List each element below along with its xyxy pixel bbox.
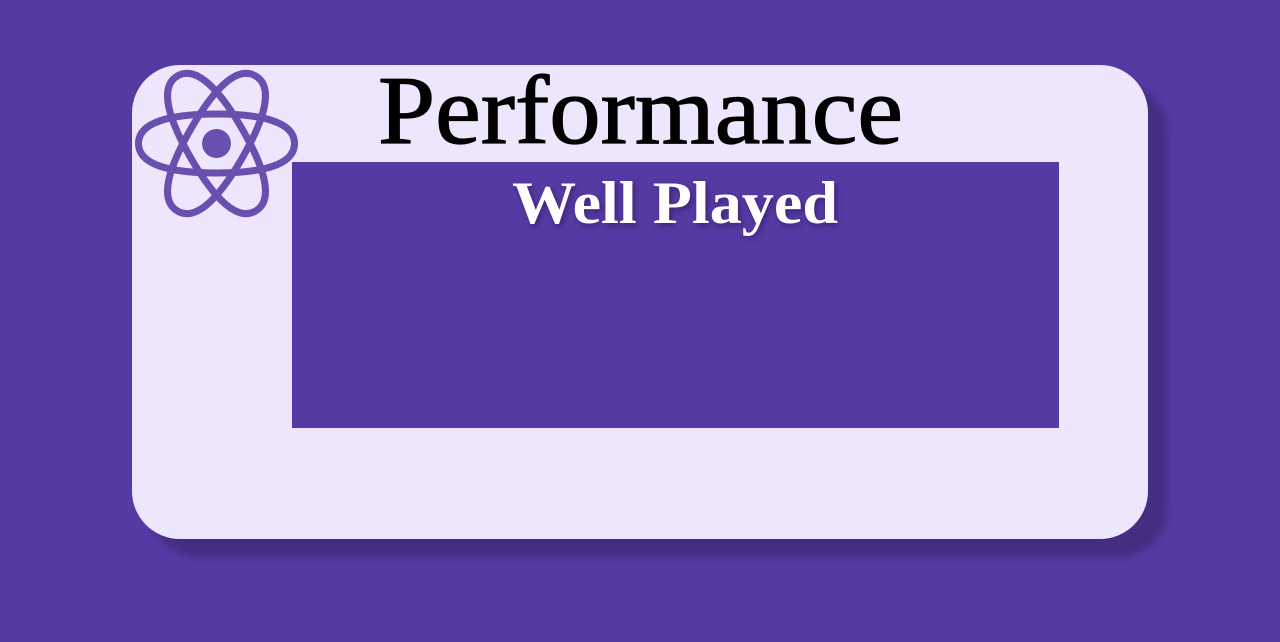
panel: result box [292,162,1059,428]
subtitle: Well Played: Well Played [512,170,838,236]
panel: card [132,65,1148,539]
title: Performance [378,57,903,165]
icon: atom [135,70,298,218]
